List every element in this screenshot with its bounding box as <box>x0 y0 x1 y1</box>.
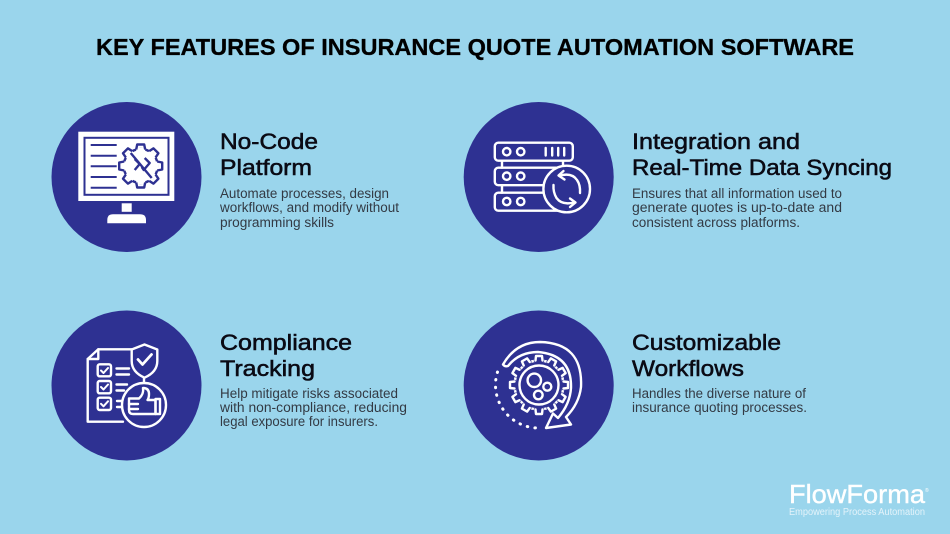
description: compliance: legal exposure for insurers. <box>220 414 378 429</box>
panel: no-code platform <box>52 102 399 252</box>
description: integration <box>632 186 842 230</box>
logo: FlowForma: ® <box>925 487 929 494</box>
description: customizable workflows: Handles the diverse nature of <box>632 386 806 401</box>
description: compliance: with non-compliance, reducing <box>219 400 407 415</box>
heading: integration and real-time data syncing: Real-Time Data Syncing <box>632 155 892 180</box>
description: customizable workflows <box>632 386 807 415</box>
logo: FlowForma: Empowering Process Automation <box>789 507 925 518</box>
heading: compliance tracking: Compliance <box>220 330 352 355</box>
title: KEY FEATURES OF INSURANCE QUOTE AUTOMATION SOFTWARE <box>96 34 854 60</box>
icon: gear with circular arrow <box>464 310 614 460</box>
heading: customizable workflows: Workflows <box>632 356 744 381</box>
panel: integration and real-time data syncing <box>464 102 892 252</box>
heading: integration and real-time data syncing: Integration and <box>632 129 800 154</box>
description: no-code platform: Automate processes, design <box>220 186 389 201</box>
heading: compliance tracking <box>220 330 352 381</box>
heading: no-code platform <box>220 129 318 180</box>
panel: compliance tracking <box>52 310 407 460</box>
description: compliance: Help mitigate risks associated <box>220 386 398 401</box>
heading: no-code platform: No-Code <box>220 129 318 154</box>
description: integration: consistent across platforms. <box>632 215 800 230</box>
heading: customizable workflows <box>632 330 781 381</box>
heading: customizable workflows: Customizable <box>632 330 781 355</box>
icon: servers with sync arrows <box>464 102 614 252</box>
description: integration: generate quotes is up-to-date and <box>632 200 842 215</box>
heading: compliance tracking: Tracking <box>220 356 315 381</box>
description: customizable workflows: insurance quoting processes. <box>632 400 807 415</box>
logo: FlowForma: FlowForma <box>789 479 926 509</box>
description: no-code platform <box>219 186 399 230</box>
description: no-code platform: workflows, and modify without <box>219 200 399 215</box>
panel: customizable workflows <box>464 310 807 460</box>
icon: monitor with gear <box>52 102 202 252</box>
icon: checklist, shield and thumbs up <box>52 310 202 460</box>
description: integration: Ensures that all information used to <box>632 186 842 201</box>
heading: no-code platform: Platform <box>220 155 312 180</box>
description: compliance <box>219 386 407 429</box>
description: no-code platform: programming skills <box>220 215 334 230</box>
heading: integration and real-time data syncing <box>632 129 892 180</box>
